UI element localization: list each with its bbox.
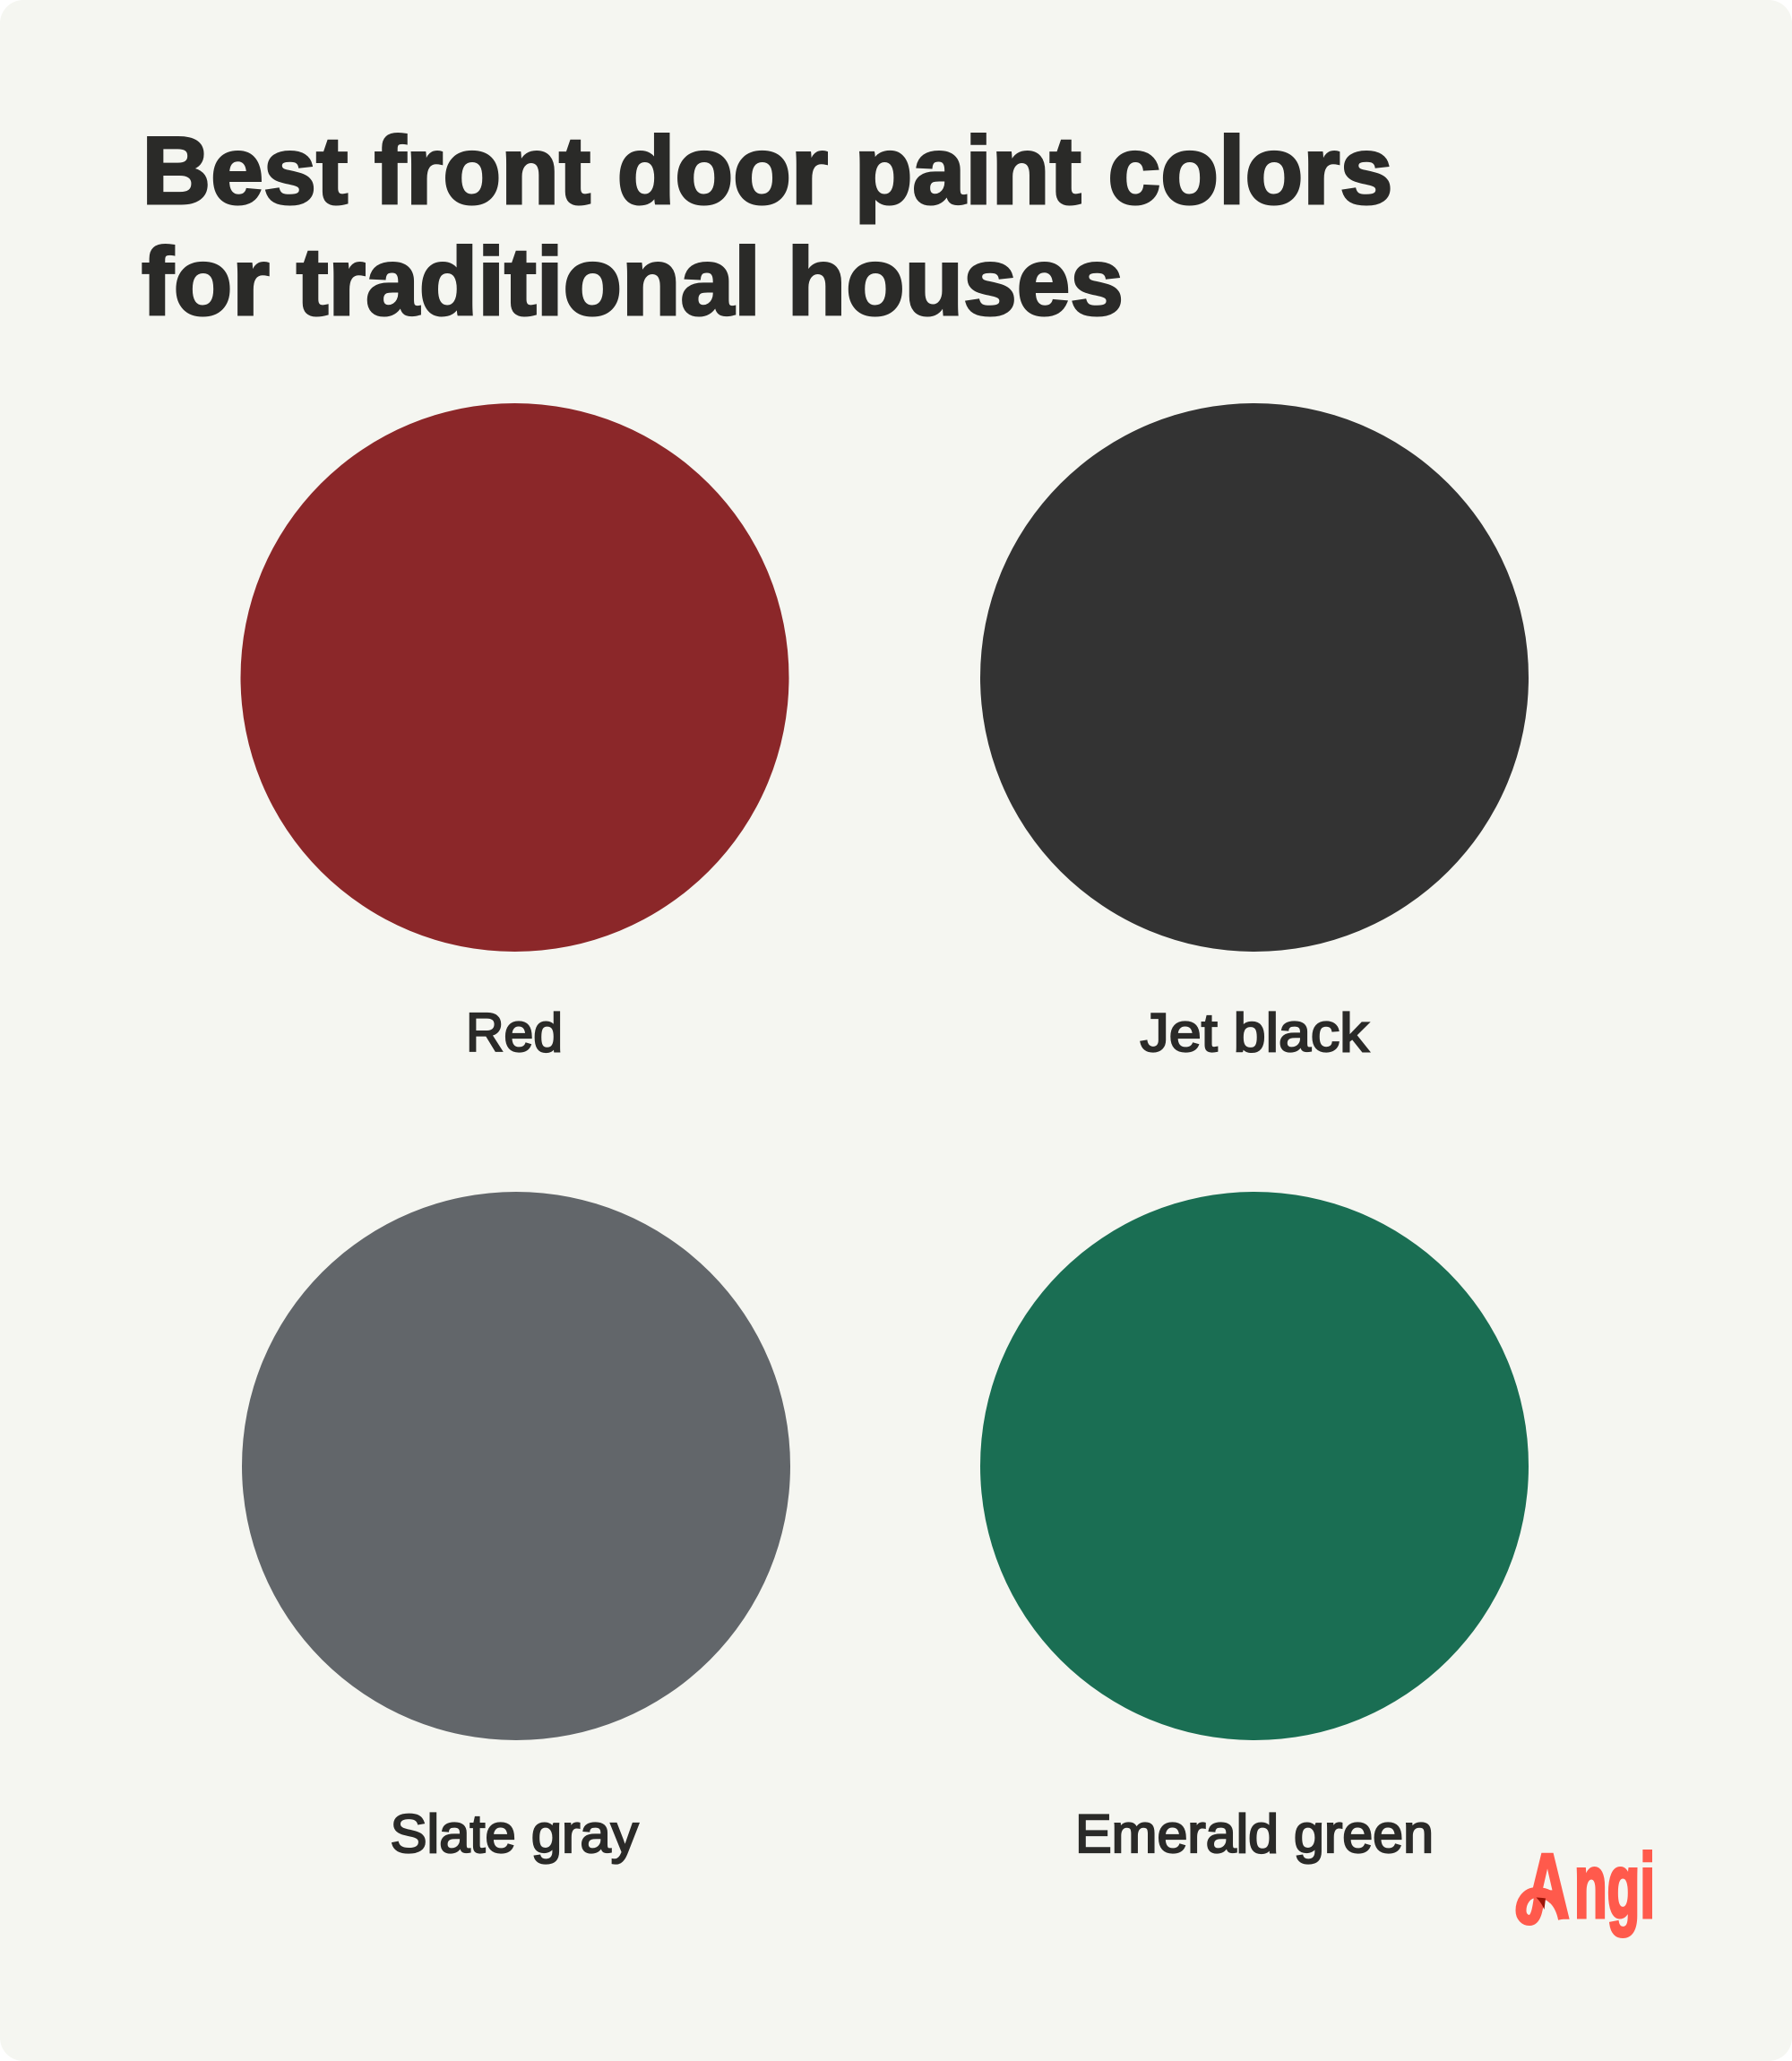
swatch: red <box>240 403 788 1063</box>
logo: Angi: A <box>1525 1834 1570 1937</box>
swatch: slate gray <box>242 1192 790 1864</box>
swatch: red: Red <box>466 1003 563 1063</box>
swatch: jet black: Jet black <box>1140 1003 1370 1063</box>
title: Best front door paint colors <box>142 116 1392 224</box>
title: for traditional houses <box>142 228 1124 335</box>
swatch: emerald green: Emerald green <box>1075 1804 1434 1864</box>
title <box>142 116 1392 335</box>
swatch: emerald green <box>980 1192 1529 1864</box>
logo: Angi <box>1516 1850 1652 1938</box>
swatch: jet black <box>980 403 1529 1063</box>
logo: Angi: ngi <box>1574 1837 1655 1937</box>
swatch: slate gray: Slate gray <box>391 1804 638 1864</box>
